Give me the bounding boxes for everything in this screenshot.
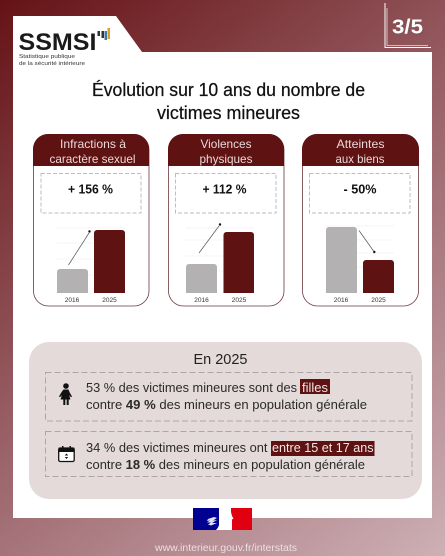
stat box: + 112 % <box>202 182 247 196</box>
bar chart: 2016 <box>334 297 349 304</box>
title: Évolution sur 10 ans du nombre de <box>92 80 365 100</box>
highlight: entre 15 et 17 ans <box>271 441 374 456</box>
stat box <box>310 174 410 213</box>
logo: SSMSI: SSMSI <box>18 29 96 56</box>
text: filles highlighted word: filles <box>302 380 328 395</box>
panel: violences physiques <box>168 134 284 306</box>
stat box: - 50% <box>344 182 377 196</box>
panel: infractions à caractère sexuel <box>33 134 149 306</box>
card header: physiques <box>200 152 252 166</box>
panel: atteintes aux biens <box>302 134 419 306</box>
heading: en 2025: En 2025 <box>194 352 248 368</box>
stat box: + 156 % <box>68 182 113 196</box>
callout: filles <box>46 372 412 421</box>
bar chart: 2025 <box>232 297 247 304</box>
text: age highlighted words: entre 15 et 17 ans <box>272 440 374 455</box>
page badge 3/5 <box>385 3 431 48</box>
highlight: filles <box>300 379 330 394</box>
bar chart <box>186 223 254 304</box>
card header <box>302 134 419 166</box>
text: age line 2: contre 18 % des mineurs en population générale <box>86 457 365 472</box>
bar chart <box>57 228 125 304</box>
icon: french republic logo <box>193 508 252 530</box>
panel: en 2025 <box>29 342 422 499</box>
page badge 3/5: 3/5 <box>394 18 424 40</box>
footer url: www.interieur.gouv.fr/interstats <box>154 542 297 554</box>
card header: caractère sexuel <box>50 152 136 166</box>
text: age line 1: 34 % des victimes mineures ont <box>86 440 268 455</box>
card header <box>168 134 284 166</box>
card header: aux biens <box>336 152 384 166</box>
bar chart: 2025 <box>102 297 117 304</box>
logo: SSMSI: de la sécurité intérieure <box>19 61 85 67</box>
title: victimes mineures <box>157 103 300 123</box>
logo: SSMSI: Statistique publique <box>19 54 75 60</box>
card header: Atteintes <box>336 137 384 151</box>
text: filles line 1: 53 % des victimes mineures sont des <box>86 380 297 395</box>
bar chart: 2016 <box>65 297 80 304</box>
bar chart <box>326 226 394 304</box>
stat box <box>176 174 276 213</box>
title <box>92 80 365 123</box>
card header <box>33 134 149 166</box>
card header: Violences <box>200 137 252 151</box>
logo: SSMSI <box>18 28 110 67</box>
page badge 3/5: 3/5 <box>392 16 423 38</box>
icon: girl <box>59 383 72 405</box>
bar chart: 2025 <box>371 297 386 304</box>
text: filles line 2: contre 49 % des mineurs en population générale <box>86 397 367 412</box>
callout: age <box>46 432 412 476</box>
card header: Infractions à <box>60 137 126 151</box>
stat box <box>41 174 141 213</box>
icon: calendar <box>59 446 74 462</box>
bar chart: 2016 <box>194 297 209 304</box>
